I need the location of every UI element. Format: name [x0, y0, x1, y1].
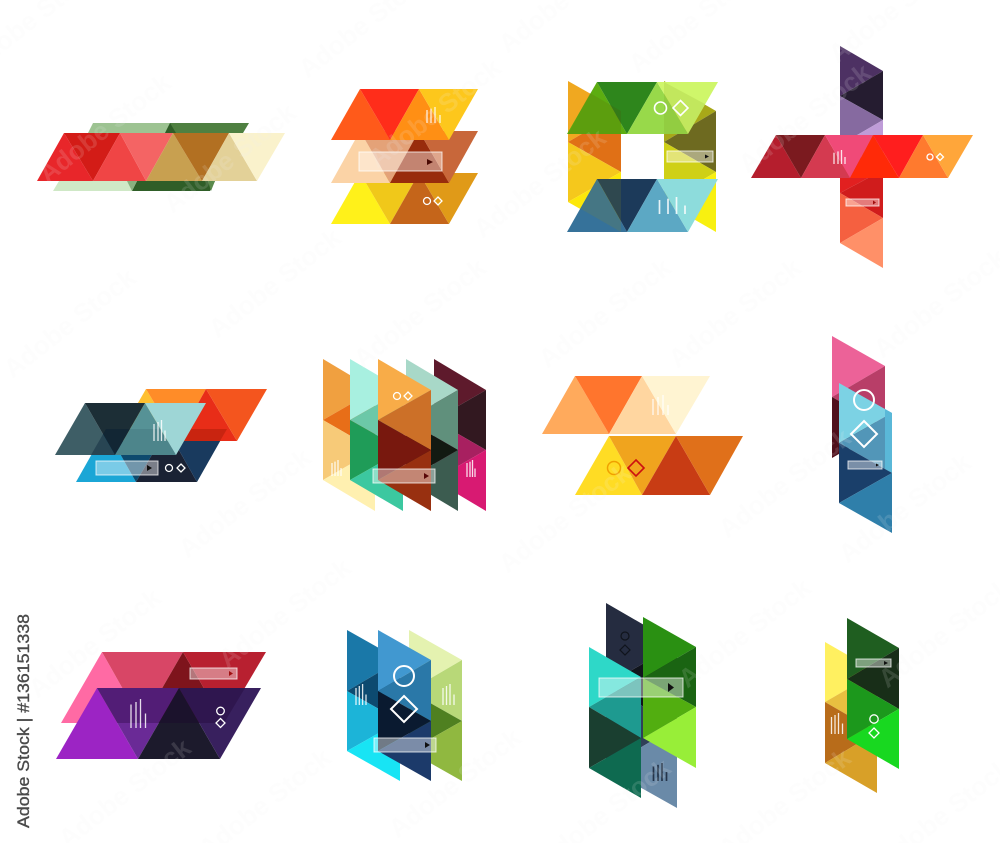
- overlap shading: [97, 688, 245, 723]
- graphic 5: three overlapping rows dark teal orange blue: [55, 389, 267, 482]
- graphic 10: blue and green vertical strips: [347, 630, 462, 781]
- watermark text: Adobe Stock: [713, 422, 857, 544]
- icon: circle and diamond: [424, 197, 442, 205]
- strip: navy: [378, 630, 431, 781]
- strip: pink: [832, 336, 885, 458]
- watermark text: Adobe Stock: [733, 57, 877, 179]
- top row: [331, 89, 478, 140]
- graphic 9: pink and purple rows: [56, 652, 266, 759]
- top row: [542, 376, 710, 434]
- graphic 4: plus-shaped banner: [751, 46, 973, 268]
- strip: plum and magenta: [434, 359, 486, 511]
- watermark text: Adobe Stock: [663, 252, 807, 374]
- icon: bar lines: [131, 699, 146, 728]
- bottom row: [331, 173, 478, 224]
- watermark text: Adobe Stock: [173, 442, 317, 564]
- icon: bar lines: [660, 197, 685, 214]
- graphic 8: pink and blue vertical strips: [832, 336, 892, 533]
- graphic 1: red and gold horizontal banner: [37, 123, 285, 191]
- bottom blue row: [567, 179, 718, 232]
- graphic 6: five vertical strips: [323, 359, 486, 511]
- watermark text: Adobe Stock: [213, 552, 357, 674]
- orange row: [116, 389, 267, 441]
- label bar with arrow: [374, 738, 436, 752]
- icon: diamond: [391, 696, 417, 722]
- icon: bar lines: [654, 763, 666, 781]
- icon: circle and diamond: [620, 632, 630, 655]
- lower purple row: [56, 688, 261, 759]
- bottom row: [575, 436, 743, 495]
- top green row: [567, 82, 718, 134]
- strip: yellow and brown: [825, 642, 877, 793]
- icon: right bar lines: [467, 460, 475, 477]
- icon: right bar lines: [443, 684, 454, 705]
- icon: left bar lines: [356, 684, 366, 705]
- strip: cyan: [347, 630, 400, 781]
- strip: teal: [589, 647, 641, 798]
- watermark text: Adobe Stock: [203, 222, 347, 344]
- icon: circle and diamond: [654, 100, 688, 116]
- watermark text: Adobe Stock: [673, 572, 817, 694]
- watermark text: Adobe Stock: [158, 97, 302, 219]
- icon: circle and diamond: [166, 464, 185, 472]
- icon: circle and diamond: [608, 460, 644, 476]
- label bar with arrow: [599, 678, 683, 697]
- icon: diamond: [851, 421, 877, 447]
- upper pink row: [61, 652, 266, 723]
- watermark text: Adobe Stock: [493, 457, 637, 579]
- right vertical band: [664, 81, 716, 232]
- watermark text: Adobe Stock: [468, 122, 612, 244]
- watermark text: Adobe Stock: [33, 67, 177, 189]
- strip: light green: [409, 630, 462, 781]
- strip: blue: [839, 383, 892, 533]
- vertical band: [840, 46, 883, 268]
- middle row: [331, 131, 478, 183]
- icon: bar lines: [154, 420, 165, 441]
- stock credit vertical text: Adobe Stock | #136151338: [14, 614, 33, 828]
- label bar with arrow: [359, 152, 442, 171]
- watermark text: Adobe Stock: [363, 52, 507, 174]
- icon: circle and diamond: [216, 707, 225, 728]
- graphic 3: square frame of four bands: [567, 81, 718, 232]
- watermark text: Adobe Stock: [383, 722, 527, 843]
- graphic 11: navy teal and green vertical strips: [589, 603, 696, 808]
- strip: navy and steel blue: [606, 603, 677, 808]
- icon: bar lines: [834, 150, 845, 164]
- icon: circle: [854, 390, 874, 410]
- icon: bar lines: [653, 395, 668, 415]
- label bar with arrow: [848, 461, 882, 469]
- watermark text: Adobe Stock: [348, 252, 492, 374]
- label bar with arrow: [373, 469, 435, 483]
- icon: circle and diamond: [869, 715, 879, 738]
- label bar with arrow: [856, 659, 891, 667]
- strip: orange: [323, 359, 375, 511]
- graphic 2: three stacked orange and yellow rows: [331, 89, 478, 224]
- graphic 7: offset orange and yellow rows: [542, 376, 743, 495]
- icon: left bar lines: [332, 460, 341, 476]
- icon: bar lines: [832, 713, 842, 734]
- back green bands: [53, 123, 249, 191]
- strip: green: [643, 617, 696, 768]
- label bar with arrow: [667, 151, 713, 162]
- icon: circle and diamond: [394, 392, 412, 400]
- label bar with arrow: [846, 199, 879, 206]
- watermark text: Adobe Stock: [833, 447, 977, 569]
- label bar with arrow: [96, 461, 158, 475]
- watermark text: Adobe Stock: [23, 582, 167, 704]
- dark teal row: [55, 403, 206, 455]
- icon: bar lines: [427, 107, 440, 123]
- icon: circle and diamond: [927, 154, 944, 160]
- strip: grey green: [406, 359, 458, 511]
- lower blue row: [76, 429, 227, 482]
- icon: circle: [394, 666, 414, 686]
- graphic 12: yellow and green vertical strips: [825, 618, 899, 793]
- strip: green: [847, 618, 899, 769]
- horizontal band: [751, 135, 973, 178]
- front triangle row: [37, 133, 285, 181]
- left vertical band: [568, 81, 621, 232]
- watermark text: Adobe Stock: [533, 252, 677, 374]
- label bar with arrow: [190, 668, 237, 679]
- watermark text: Adobe Stock: [0, 262, 142, 384]
- strip: amber and maroon: [378, 359, 431, 511]
- strip: mint green: [350, 359, 403, 511]
